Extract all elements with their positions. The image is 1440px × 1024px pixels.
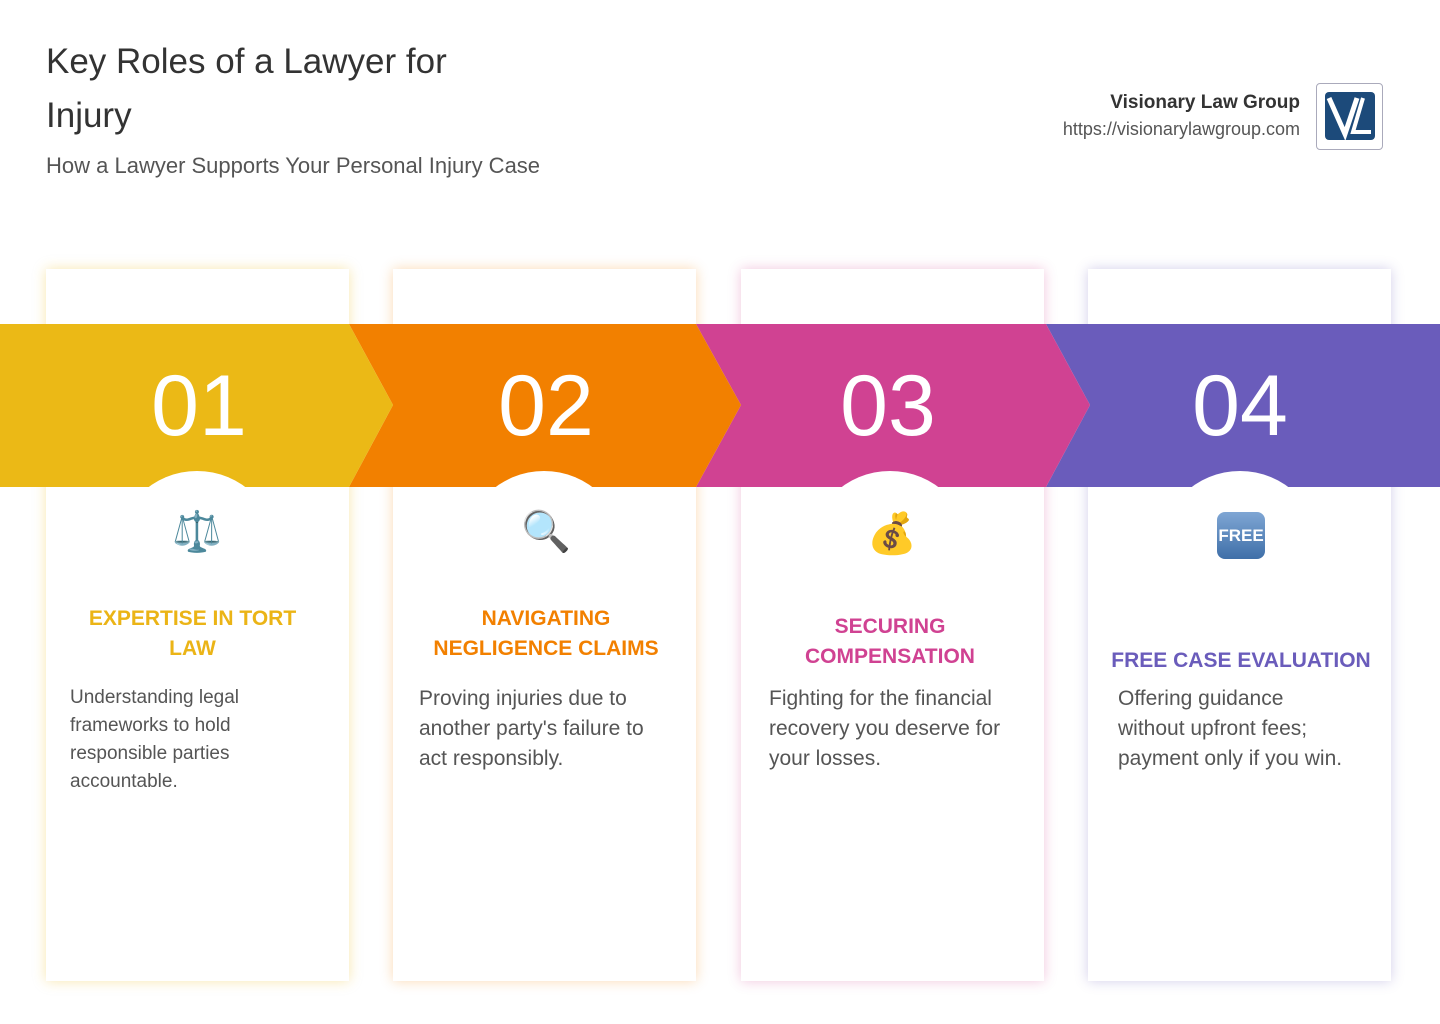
text: recovery you deserve for	[769, 717, 1000, 740]
chevron band: 04	[1192, 358, 1288, 454]
text: payment only if you win.	[1118, 747, 1342, 770]
text: act responsibly.	[419, 747, 563, 770]
icon: free: FREE	[1218, 526, 1264, 545]
brand: Visionary Law Group	[1110, 92, 1300, 113]
text: accountable.	[70, 771, 178, 792]
subtitle: How a Lawyer Supports Your Personal Injury Case	[46, 153, 540, 178]
icon: money bag: 💰	[867, 512, 917, 556]
text: frameworks to hold	[70, 715, 231, 736]
text: Understanding legal	[70, 687, 239, 708]
title: Key Roles of a Lawyer for Injury	[46, 42, 447, 135]
card 3	[741, 269, 1044, 981]
chevron band: 03	[840, 358, 936, 454]
text: Proving injuries due to	[419, 687, 627, 710]
texts 3: SECURING COMPENSATION	[805, 615, 975, 668]
text: another party's failure to	[419, 717, 644, 740]
icon: magnifier: 🔍	[521, 510, 571, 554]
texts 2: NAVIGATING NEGLIGENCE CLAIMS	[433, 607, 659, 660]
text: without upfront fees;	[1118, 717, 1307, 740]
chevron band: 02	[498, 358, 594, 454]
texts 1: EXPERTISE IN TORT LAW	[89, 607, 296, 660]
card 4	[1088, 269, 1391, 981]
card 2	[393, 269, 696, 981]
text: responsible parties	[70, 743, 229, 764]
card 1	[46, 269, 349, 981]
brand: https://visionarylawgroup.com	[1063, 119, 1300, 139]
text: Fighting for the financial	[769, 687, 992, 710]
text: your losses.	[769, 747, 881, 770]
texts 4: FREE CASE EVALUATION	[1111, 649, 1371, 672]
logo	[1316, 83, 1383, 150]
icon: free	[1217, 512, 1265, 559]
brand	[1063, 92, 1300, 139]
icon: scales: ⚖️	[172, 510, 222, 554]
chevron band: 01	[151, 358, 247, 454]
text: Offering guidance	[1118, 687, 1283, 710]
